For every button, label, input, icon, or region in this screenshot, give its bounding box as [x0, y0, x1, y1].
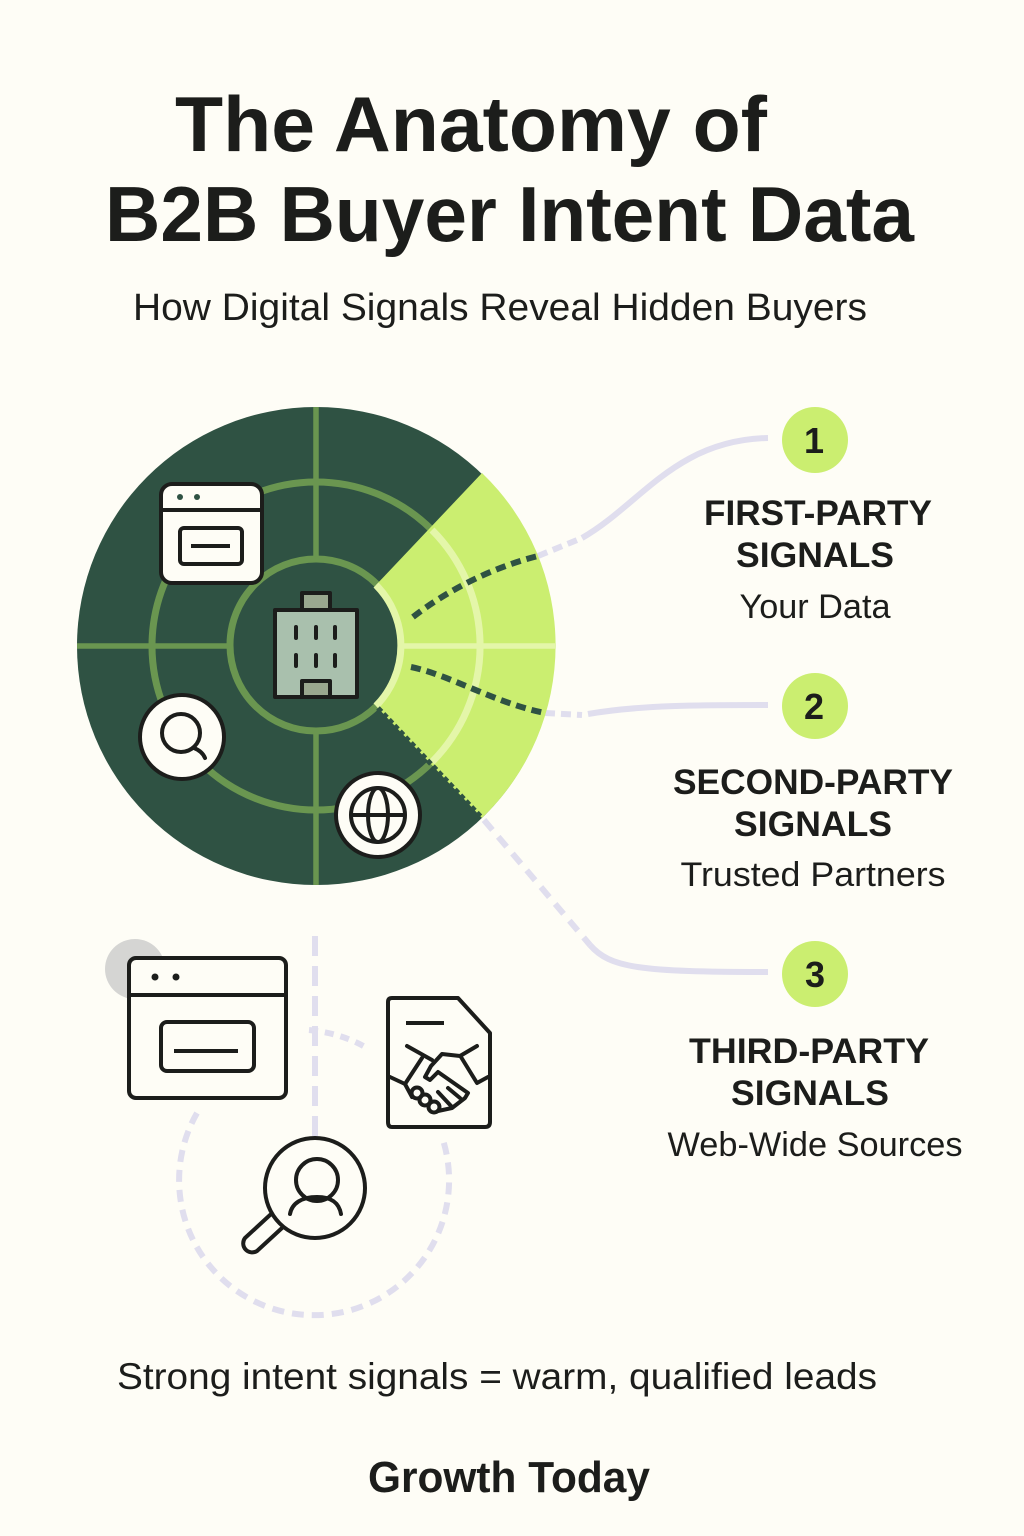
connector: first-party [538, 438, 768, 556]
dark disc [77, 407, 555, 885]
icon: building [275, 593, 357, 697]
badge 3 [782, 941, 848, 1007]
badge 2 [782, 673, 848, 739]
radial diagram [77, 407, 556, 885]
dashed signal lines [378, 556, 545, 818]
icon: magnifier with person [243, 1138, 365, 1252]
subheading 2: Trusted Partners [680, 856, 946, 894]
step 1 [704, 407, 932, 626]
heading 2: SIGNALS [734, 805, 892, 844]
heading 2 [673, 763, 953, 844]
dashed flow lines [179, 936, 449, 1315]
connector: second-party [545, 705, 768, 715]
badge 2: 2 [804, 686, 824, 727]
badge 1 [782, 407, 848, 473]
heading 3: SIGNALS [731, 1074, 889, 1113]
heading 1: FIRST-PARTY [704, 494, 932, 533]
icon: search badge [140, 695, 224, 779]
subheading 1: Your Data [740, 588, 891, 626]
title [105, 80, 915, 258]
heading 3: THIRD-PARTY [689, 1032, 929, 1071]
heading 2: SECOND-PARTY [673, 763, 953, 802]
highlighted lime segment [376, 473, 556, 818]
icon: browser badge [161, 484, 262, 583]
heading 1: SIGNALS [736, 536, 894, 575]
dark rings and spokes [77, 407, 480, 885]
icon: globe badge [336, 773, 420, 857]
step 2 [673, 673, 953, 894]
connector: third-party [484, 820, 768, 972]
takeaway text: Strong intent signals = warm, qualified leads [117, 1356, 877, 1397]
badge 1: 1 [804, 420, 824, 461]
light rings in lime segment [376, 530, 555, 762]
icon: partner document with handshake [388, 998, 490, 1127]
icon: large browser window [129, 958, 286, 1098]
heading 3 [689, 1032, 929, 1113]
heading 1 [704, 494, 932, 575]
brand footer: Growth Today [368, 1453, 651, 1502]
subtitle: How Digital Signals Reveal Hidden Buyers [133, 287, 867, 329]
badge 3: 3 [805, 954, 825, 995]
title: B2B Buyer Intent Data [105, 170, 915, 258]
title: The Anatomy of [175, 80, 768, 168]
step 3 [668, 941, 962, 1164]
subheading 3: Web-Wide Sources [668, 1126, 962, 1164]
grey accent dot [105, 939, 165, 999]
